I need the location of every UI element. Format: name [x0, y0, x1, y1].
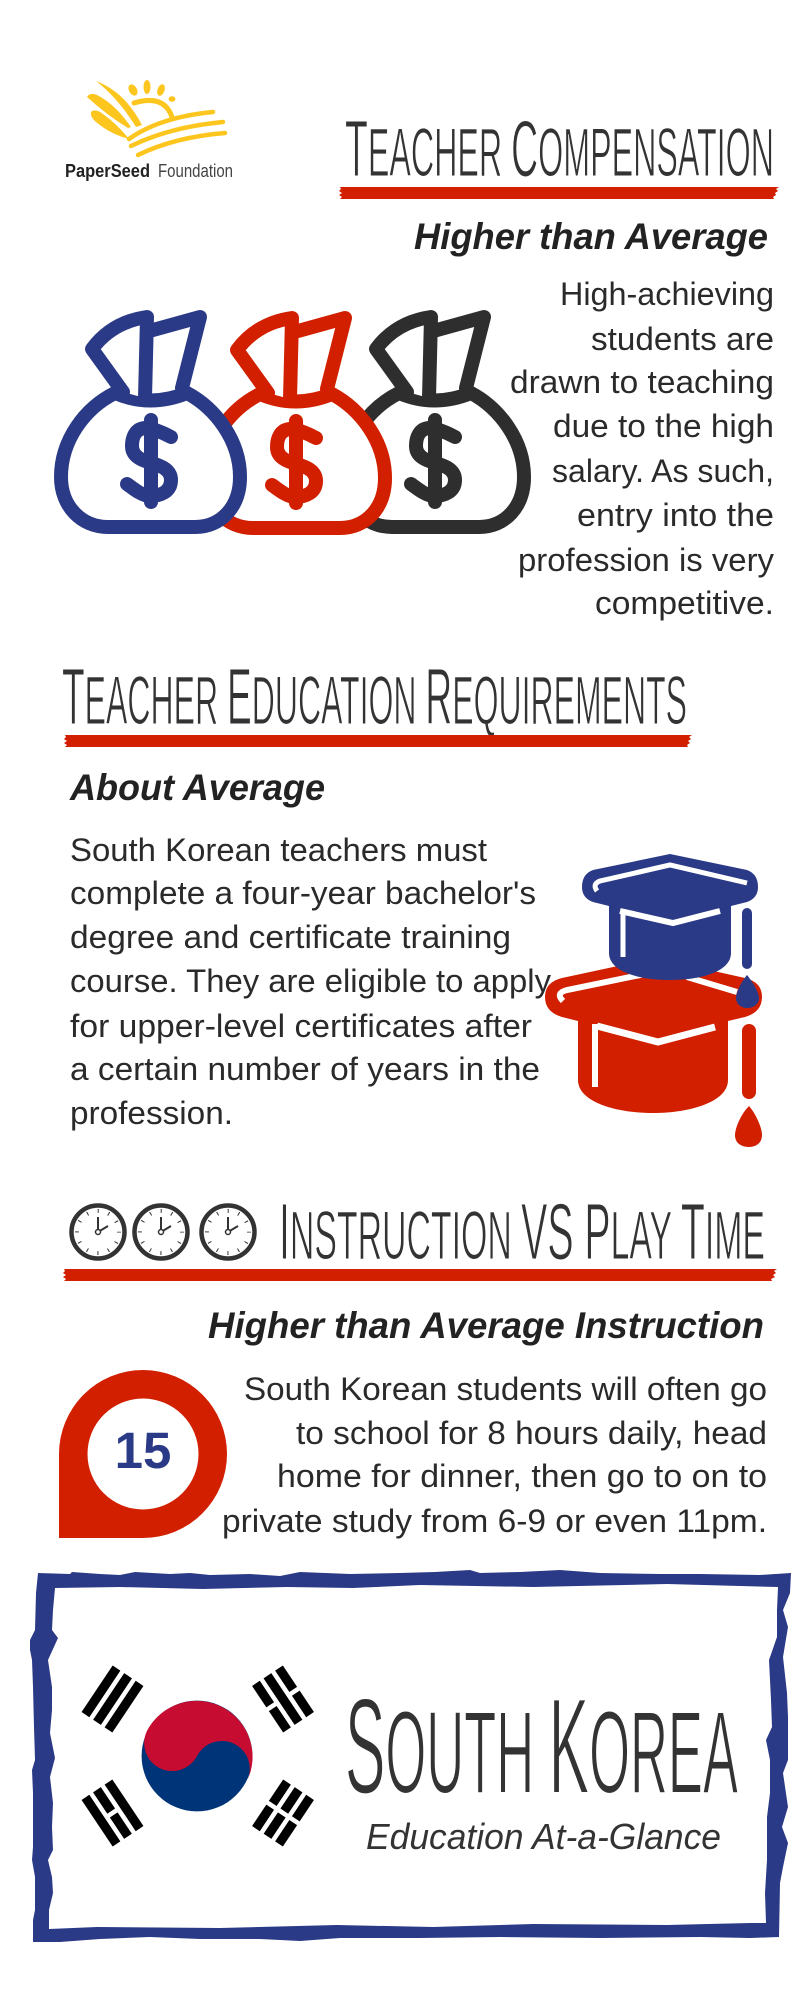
text block: teacher compensation: competitive.	[595, 585, 774, 621]
icons: stacked graduation caps	[545, 854, 762, 1147]
text block: teacher compensation: students are	[591, 321, 774, 357]
subheading: Higher than Average: Higher than Average	[414, 216, 768, 257]
text block: instruction time: home for dinner, then go to on to	[277, 1458, 767, 1494]
trigram top left	[82, 1665, 143, 1733]
text block: teacher compensation: entry into the	[577, 497, 774, 533]
icon: map pin with number 15	[59, 1370, 227, 1538]
logo wordmark: Foundation	[158, 161, 233, 181]
icons: three clocks	[72, 1206, 254, 1258]
text block: instruction time: South Korean students will often go	[244, 1371, 767, 1407]
text block: education requirements: South Korean teachers must	[70, 832, 487, 868]
text block: education requirements	[70, 832, 551, 1131]
text block: teacher compensation: profession is very	[518, 542, 774, 578]
taegeuk	[142, 1701, 253, 1811]
text block: education requirements: degree and certificate training	[70, 919, 511, 955]
text block: teacher compensation: due to the high	[553, 408, 774, 444]
trigram bottom left	[82, 1779, 143, 1847]
icon: black money bag	[345, 317, 524, 527]
logo wordmark: PaperSeed	[65, 161, 150, 181]
icon: clock 3	[202, 1206, 254, 1258]
flag of South Korea	[82, 1665, 314, 1847]
divider: red brush bar 1	[339, 187, 779, 199]
text block: teacher compensation	[510, 276, 774, 621]
panel: South Korea title frame	[30, 1570, 791, 1942]
text block: instruction time: to school for 8 hours daily, head	[296, 1415, 767, 1451]
icon: red money bag	[206, 318, 385, 528]
icon: red graduation cap	[545, 958, 762, 1147]
icon: clock 2	[134, 1206, 188, 1258]
text block: teacher compensation: salary. As such,	[552, 453, 774, 489]
text block: education requirements: course. They are eligible to apply	[70, 963, 551, 999]
subheading: About Average: About Average	[69, 767, 325, 808]
text block: instruction time: private study from 6-9 or even 11pm.	[222, 1503, 767, 1539]
icon: sun and fields	[87, 80, 225, 155]
text block: teacher compensation: High-achieving	[560, 276, 774, 312]
text block: education requirements: a certain number of years in the	[70, 1051, 540, 1087]
icon: map pin with number 15: 15	[115, 1422, 171, 1479]
text block: education requirements: profession.	[70, 1095, 233, 1131]
text block: education requirements: for upper-level certificates after	[70, 1008, 532, 1044]
icons: three money bags	[61, 317, 524, 528]
logo: PaperSeed Foundation	[65, 80, 233, 181]
trigram bottom right	[252, 1779, 314, 1847]
icon: clock 1	[72, 1206, 124, 1258]
icon: blue graduation cap	[582, 854, 759, 1008]
text block: education requirements: complete a four-year bachelor's	[70, 875, 536, 911]
subheading: Higher than Average Instruction: Higher than Average Instruction	[208, 1305, 764, 1346]
trigram top right	[252, 1665, 314, 1733]
divider: red brush bar 2	[64, 735, 692, 747]
text block: instruction time	[222, 1371, 767, 1539]
blue rough frame	[30, 1570, 791, 1942]
divider: red brush bar 3	[63, 1269, 777, 1281]
icon: blue money bag	[61, 317, 240, 527]
text block: teacher compensation: drawn to teaching	[510, 364, 774, 400]
subtitle: Education At-a-Glance: Education At-a-Glance	[366, 1816, 721, 1857]
